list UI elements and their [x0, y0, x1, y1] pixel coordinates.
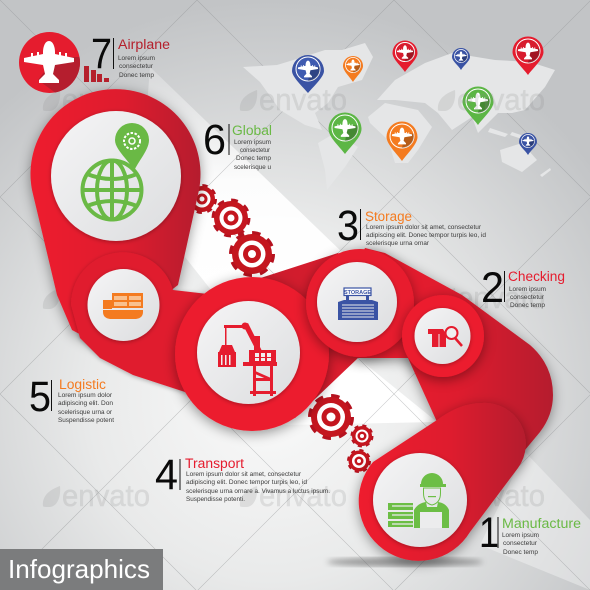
body text: Donec temp: [236, 155, 271, 162]
divider: [498, 517, 499, 548]
icon: storage: STORAGE: [344, 290, 371, 296]
body text: Lorem ipsum dolor sit amet, consectetur: [366, 224, 482, 231]
body text: scelerisque urna ornare a. Vivamus a luctus ipsum.: [186, 488, 330, 495]
gear C: [232, 234, 272, 274]
heading: Checking: [508, 269, 565, 284]
red band: logistic to transport: [71, 252, 260, 420]
body text: Lorem ipsum: [509, 286, 546, 293]
heading: Manufacture: [502, 516, 581, 531]
red band: transport to storage: [208, 253, 375, 420]
number 3: 3: [337, 202, 359, 250]
pin: red large: [512, 36, 544, 75]
red ring: [402, 295, 484, 377]
body text: [509, 286, 546, 309]
body text: [366, 224, 486, 247]
white disc: [88, 269, 160, 341]
body text: Donec temp: [510, 302, 545, 309]
block 1: manufacture: [479, 509, 581, 557]
icon: box and magnifier: [428, 327, 462, 347]
body text: [58, 392, 114, 424]
node 4: transport: [175, 277, 329, 431]
body text: Donec temp: [119, 72, 154, 79]
body text: Lorem ipsum dolor sit amet, consectetur: [186, 471, 302, 478]
gear B: [214, 201, 248, 235]
divider: [113, 38, 114, 69]
node 3: storage: [306, 249, 414, 357]
number 5: 5: [29, 373, 51, 421]
body text: consectetur: [240, 147, 271, 154]
body text: adipiscing elit. Donec tempor turpis leo, id: [186, 479, 307, 486]
icon: container ship: [103, 293, 143, 319]
body text: Suspendisse potenti.: [186, 496, 245, 503]
gear A: [189, 186, 215, 212]
crane window details: [221, 353, 271, 365]
body text: adipiscing elit. Don: [58, 400, 113, 407]
body text: Lorem ipsum dolor: [58, 392, 113, 399]
world map: [243, 43, 555, 190]
node 2: checking: [402, 295, 484, 377]
pin: blue small: [452, 48, 470, 70]
block 3: storage: [337, 202, 486, 250]
white disc: [317, 262, 397, 342]
watermark: [43, 82, 545, 513]
divider: [228, 124, 230, 155]
light lower right wedge: [480, 452, 590, 590]
white disc: [51, 111, 181, 241]
body text: Lorem ipsum: [234, 139, 271, 146]
pin: orange large: [386, 122, 418, 161]
body text: Lorem ipsum: [502, 532, 539, 539]
body text: consectetur: [510, 294, 545, 301]
pin: green left: [328, 112, 362, 154]
pin: blue australia: [519, 133, 537, 155]
gears upper: [189, 186, 272, 274]
block 6: global: [203, 116, 272, 171]
icon: worker with boxes: [388, 473, 449, 528]
number 6: 6: [203, 116, 226, 164]
red ring: [175, 277, 329, 431]
heading: Transport: [185, 456, 244, 471]
divider: [504, 271, 505, 302]
pin: red: [392, 40, 418, 72]
node 5: logistic: [88, 269, 160, 341]
node 1: manufacture: [373, 453, 467, 547]
icon: airplane badge: [19, 32, 80, 93]
node 6: global: [51, 111, 181, 241]
heading: Airplane: [118, 37, 170, 52]
bar chart: [84, 66, 109, 82]
body text: [502, 532, 539, 556]
body text: Donec temp: [503, 549, 538, 556]
number 4: 4: [155, 451, 178, 499]
body text: adipiscing elit. Donec tempor turpis leo, id: [366, 232, 486, 239]
body text: [186, 471, 330, 503]
divider: [51, 380, 52, 411]
red band: globe: [31, 89, 200, 345]
block 7: airplane: [19, 30, 170, 93]
body text: Lorem ipsum: [118, 55, 155, 62]
heading: Storage: [365, 209, 412, 224]
ground shadow: [327, 558, 483, 566]
title banner: Infographics: [8, 554, 150, 584]
body text: [234, 139, 271, 171]
gear D: [311, 397, 351, 437]
heading: Global: [232, 123, 272, 138]
divider: [180, 459, 181, 490]
gears lower: [311, 397, 372, 472]
red band: manufacture: [359, 403, 526, 561]
light diagonal band: [140, 67, 345, 295]
body text: scelerisque u: [234, 164, 271, 171]
gear F: [348, 450, 370, 472]
body text: consectetur: [503, 540, 538, 547]
divider: [360, 209, 361, 240]
pin: blue large: [292, 55, 324, 93]
white disc: [197, 301, 300, 404]
title banner: [0, 549, 163, 590]
map pins: [292, 36, 544, 161]
red band: checking: [340, 248, 553, 462]
white disc: [373, 453, 467, 547]
body text: Suspendisse potent: [58, 417, 114, 424]
number 1: 1: [479, 509, 499, 557]
body text: scelerisque urna ornar: [366, 240, 430, 247]
white disc: [414, 308, 470, 364]
number 2: 2: [481, 264, 504, 312]
block 2: checking: [481, 264, 565, 312]
number 7: 7: [91, 30, 112, 78]
red ring: [306, 249, 414, 357]
gear E: [352, 426, 372, 446]
pin: orange small: [343, 56, 363, 82]
heading: Logistic: [59, 377, 106, 392]
block 4: transport: [155, 451, 330, 503]
body text: consectetur: [119, 63, 154, 70]
body text: [118, 55, 155, 79]
icon: crane: [218, 322, 277, 396]
pin: green right: [462, 86, 494, 125]
block 5: logistic: [29, 373, 114, 424]
light triangle: [285, 358, 437, 425]
icon: globe with pin: [82, 123, 149, 220]
body text: scelerisque urna or: [58, 409, 113, 416]
